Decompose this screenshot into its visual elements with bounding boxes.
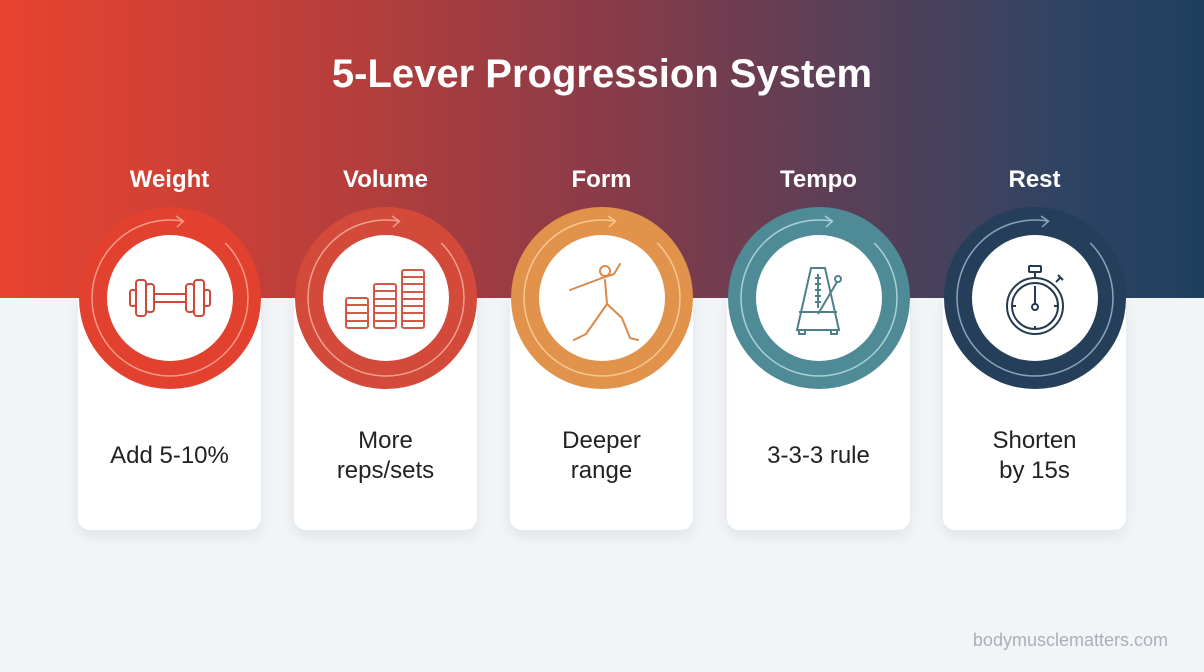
- text: form: Deeper: [562, 427, 641, 454]
- card: form: [510, 292, 693, 530]
- label: tempo: Tempo: [780, 166, 857, 193]
- circle icon: lunge figure: [511, 207, 693, 389]
- label: volume: Volume: [343, 166, 428, 193]
- text: weight: Add 5-10%: [110, 442, 229, 469]
- lever: form: [509, 166, 694, 537]
- header band: [0, 0, 1204, 298]
- text: form: range: [571, 457, 632, 484]
- card: rest: [943, 292, 1126, 530]
- lever: weight: [77, 166, 262, 537]
- card: volume: [294, 292, 477, 530]
- text: volume: reps/sets: [337, 457, 434, 484]
- text: volume: [337, 427, 434, 484]
- circle icon: stopwatch: [944, 207, 1126, 389]
- lever: tempo: [726, 166, 911, 537]
- text: form: [562, 427, 641, 484]
- card: tempo: [727, 292, 910, 530]
- footer url: bodymusclematters.com: [973, 630, 1168, 650]
- title: 5-Lever Progression System: [332, 52, 872, 96]
- label: weight: Weight: [130, 166, 209, 193]
- label: form: Form: [572, 166, 632, 193]
- card: weight: [78, 292, 261, 530]
- text: rest: by 15s: [999, 457, 1070, 484]
- text: tempo: 3-3-3 rule: [767, 442, 870, 469]
- circle icon: stacks: [295, 207, 477, 389]
- text: rest: Shorten: [992, 427, 1077, 454]
- circle icon: metronome: [728, 207, 910, 389]
- lever: volume: [293, 166, 478, 537]
- text: rest: [992, 427, 1077, 484]
- text: volume: More: [358, 427, 413, 454]
- circle icon: dumbbell: [79, 207, 261, 389]
- lever: rest: [942, 166, 1127, 537]
- label: rest: Rest: [1008, 166, 1061, 193]
